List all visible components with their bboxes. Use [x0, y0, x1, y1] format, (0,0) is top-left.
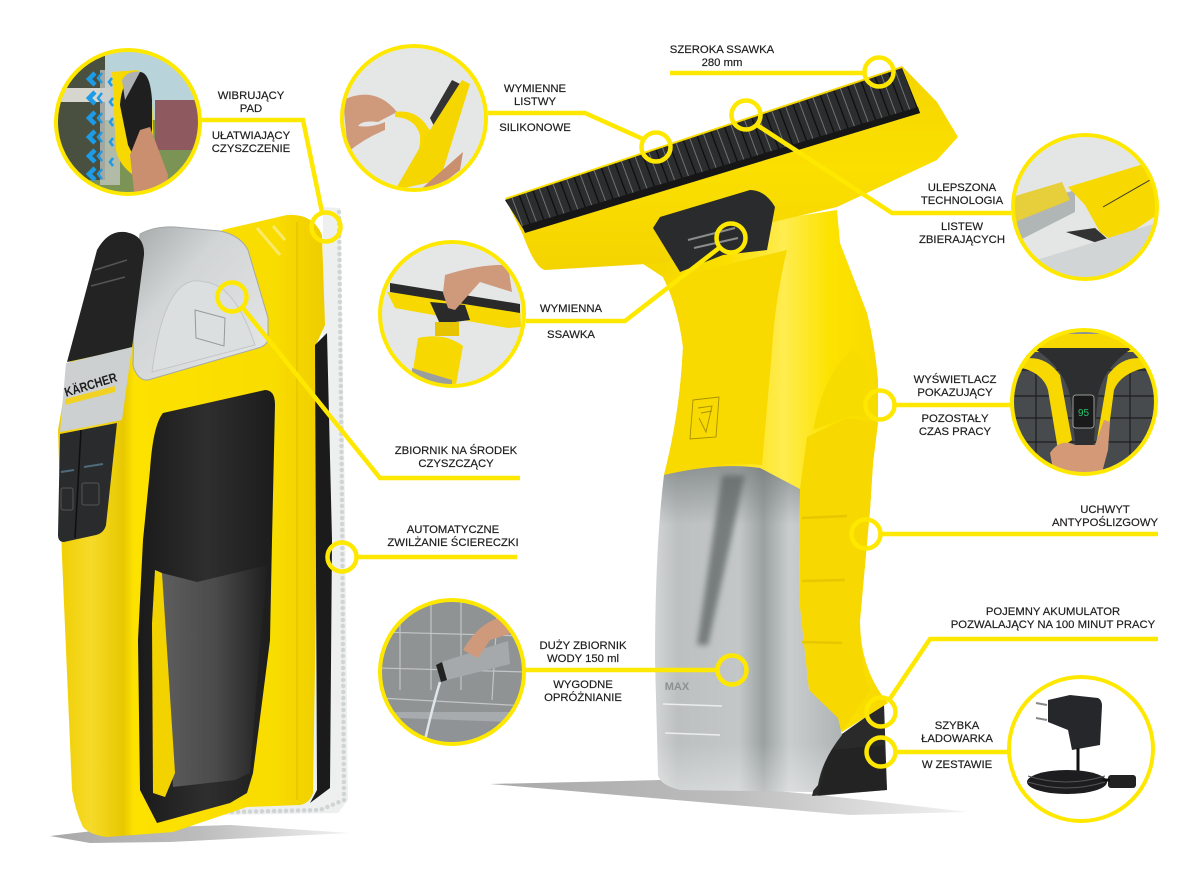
marker: szeroka ssawka [670, 58, 894, 86]
marker: ładowarka [866, 738, 1010, 766]
label: ładowarka: W ZESTAWIE [922, 759, 993, 771]
circle: pouring water [378, 598, 528, 752]
label: wymienne listwy [499, 83, 571, 134]
cap inner dome [152, 281, 255, 372]
label: akumulator: POJEMNY AKUMULATOR [986, 606, 1120, 618]
label: zbiornik na środek: CZYSZCZĄCY [418, 458, 494, 470]
label: wyświetlacz: POZOSTAŁY [922, 413, 989, 425]
MAX marking: MAX [665, 681, 690, 693]
label: zbiornik na środek: ZBIORNIK NA ŚRODEK [395, 444, 518, 457]
label: akumulator [951, 606, 1156, 631]
marker: wyświetlacz [866, 390, 1012, 420]
handle body [640, 210, 888, 732]
label: ulepszona technologia: TECHNOLOGIA [921, 195, 1004, 207]
front handle panel [663, 250, 787, 475]
buttons panel [58, 423, 117, 542]
label: akumulator: POZWALAJĄCY NA 100 MINUT PRACY [951, 619, 1156, 631]
label: uchwyt [1052, 504, 1158, 529]
circle: vibrating pad [54, 48, 202, 196]
label: wibrujący pad: WIBRUJĄCY [218, 90, 285, 102]
label: szeroka ssawka: 280 mm [702, 57, 742, 69]
label: szeroka ssawka: SZEROKA SSAWKA [670, 44, 775, 56]
circle: replaceable nozzle [378, 240, 528, 392]
label: wyświetlacz: CZAS PRACY [919, 426, 992, 438]
vent highlights [257, 226, 285, 255]
marker: ulepszona technologia [732, 100, 1011, 213]
silver tank cap [133, 227, 268, 380]
yellow body [58, 215, 325, 837]
marker: wibrujący pad [200, 120, 340, 242]
black side strip [310, 333, 332, 803]
label: automatyczne zwilżanie [387, 524, 519, 549]
label: ładowarka: SZYBKA [935, 720, 980, 732]
right product: window vacuum [490, 66, 968, 815]
marker: akumulator [866, 639, 1158, 726]
grip notches [802, 516, 847, 643]
label: ulepszona technologia [919, 182, 1005, 246]
back plate crease [296, 222, 298, 800]
rear lower panel [799, 418, 878, 732]
marker: wymienna ssawka [526, 224, 746, 321]
label: uchwyt: UCHWYT [1080, 504, 1130, 516]
head [505, 66, 958, 270]
label: uchwyt: ANTYPOŚLIZGOWY [1052, 516, 1158, 529]
label: ulepszona technologia: ZBIERAJĄCYCH [919, 234, 1005, 246]
marker: duży zbiornik [524, 656, 746, 684]
logo on handle [690, 397, 719, 439]
label: wibrujący pad: PAD [240, 103, 262, 115]
label: automatyczne zwilżanie: ZWILŻANIE ŚCIERECZKI [387, 536, 519, 549]
label: wymienna ssawka [540, 303, 603, 341]
label: wymienna ssawka: SSAWKA [547, 329, 595, 341]
black neck grip [653, 190, 775, 272]
label: wymienne listwy: LISTWY [514, 96, 556, 108]
label: wibrujący pad [212, 90, 291, 155]
label: ulepszona technologia: ULEPSZONA [928, 182, 997, 194]
floor shadow right [490, 780, 968, 815]
label: wymienne listwy: SILIKONOWE [499, 122, 571, 134]
tube in tank [697, 475, 745, 645]
label: automatyczne zwilżanie: AUTOMATYCZNE [407, 524, 500, 536]
MAX marking [663, 681, 722, 735]
cleaning cloth [222, 207, 348, 815]
floor shadow left [50, 825, 350, 843]
silver brand band [60, 347, 132, 432]
circle: collecting strip technology [1010, 133, 1160, 285]
label: wymienna ssawka: WYMIENNA [540, 303, 603, 315]
left product: window vac with cloth pad [50, 207, 350, 843]
marker: automatyczne zwilżanie [328, 542, 517, 572]
black handle top [67, 232, 144, 362]
label: duży zbiornik: DUŻY ZBIORNIK [539, 639, 627, 652]
base [812, 704, 887, 796]
circle: replaceable silicone strips [340, 45, 490, 195]
callout lines and markers [200, 58, 1158, 766]
label: zbiornik na środek [395, 444, 518, 470]
label: wyświetlacz [914, 373, 997, 438]
black squeegee pad [138, 390, 275, 823]
label: wibrujący pad: CZYSZCZENIE [212, 143, 291, 155]
inner yellow finger [152, 570, 175, 797]
circle: display with remaining time [1010, 328, 1160, 480]
marker: zbiornik na środek [218, 282, 520, 478]
label: ładowarka: ŁADOWARKA [921, 733, 993, 745]
label: ulepszona technologia: LISTEW [941, 221, 983, 233]
silicone blade [505, 68, 920, 232]
label: wibrujący pad: UŁATWIAJĄCY [212, 130, 291, 142]
label: wyświetlacz: POKAZUJĄCY [917, 387, 993, 399]
label: duży zbiornik: WYGODNE [553, 679, 613, 691]
logo on cap [195, 310, 225, 346]
inner grey panel [162, 565, 268, 787]
label: ładowarka [921, 720, 993, 771]
label: szeroka ssawka [670, 44, 775, 69]
label: wymienne listwy: WYMIENNE [504, 83, 567, 95]
marker: listwy [488, 113, 670, 162]
water tank [655, 466, 842, 792]
display digits: 95 [1078, 408, 1089, 419]
marker: uchwyt [852, 520, 1158, 548]
brand name: KÄRCHER [63, 369, 119, 400]
circle: charger [1009, 677, 1153, 821]
label: duży zbiornik: WODY 150 ml [547, 653, 619, 665]
label: duży zbiornik: OPRÓŻNIANIE [544, 691, 622, 704]
label: wyświetlacz: WYŚWIETLACZ [914, 373, 997, 386]
label: duży zbiornik [539, 639, 627, 704]
